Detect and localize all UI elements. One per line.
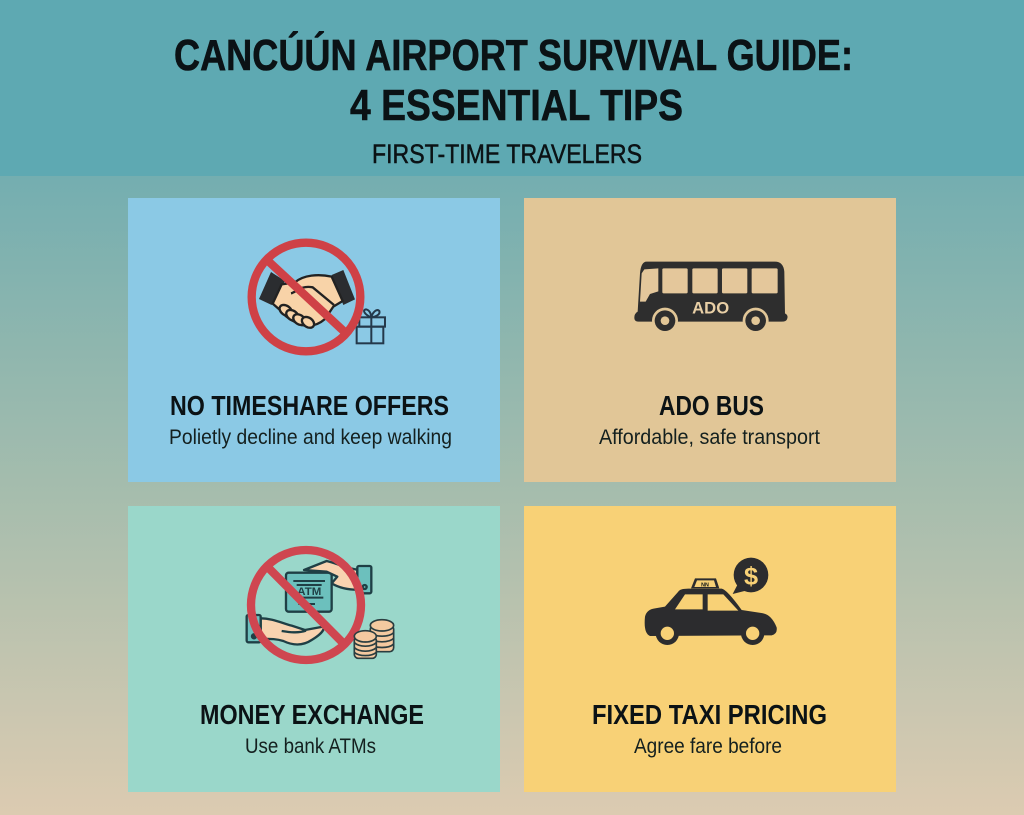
icon: taxi roof sign: NN [701, 582, 709, 588]
icon: wheels [652, 308, 769, 334]
heading: MONEY EXCHANGE [200, 699, 424, 730]
icon: lower hand [247, 615, 324, 644]
icon: prohibition sign [252, 243, 360, 351]
icon: left cuff [259, 272, 285, 305]
heading: ADO BUS [659, 390, 764, 421]
title line 2: 4 ESSENTIAL TIPS [350, 81, 683, 130]
icon: bus [634, 262, 788, 334]
icon: prohibited handshake with gift [252, 243, 385, 351]
bus label: ADO [692, 298, 729, 317]
heading: FIXED TAXI PRICING [592, 699, 827, 730]
icon: price speech bubble: $ [744, 562, 758, 590]
icon: taxi [645, 558, 777, 645]
title line 1: CANCÚÚN AIRPORT SURVIVAL GUIDE: [174, 30, 853, 80]
icon: taxi wheels [656, 622, 764, 645]
icon: coin stacks [354, 620, 394, 658]
icon: atm card: ATM [297, 586, 321, 598]
panel: money exchange [128, 506, 500, 792]
description: Affordable, safe transport [599, 426, 820, 449]
icon: prohibited money exchange [247, 550, 394, 660]
description: Agree fare before [634, 735, 782, 758]
header banner [0, 0, 1024, 176]
heading: NO TIMESHARE OFFERS [170, 390, 449, 421]
panel: ado bus [524, 198, 896, 482]
subtitle: FIRST-TIME TRAVELERS [372, 139, 642, 169]
panel: no timeshare offers [128, 198, 500, 482]
description: Polietly decline and keep walking [169, 426, 452, 449]
icon: taxi windows [675, 594, 738, 611]
icon: clasped hands [273, 275, 343, 330]
panel: fixed taxi pricing [524, 506, 896, 792]
icon: prohibition sign [251, 550, 361, 660]
icon: right cuff [332, 270, 355, 305]
icon: upper hand [304, 561, 371, 593]
icon: gift box [357, 309, 385, 343]
description: Use bank ATMs [245, 735, 376, 758]
icon: atm card [286, 573, 332, 612]
